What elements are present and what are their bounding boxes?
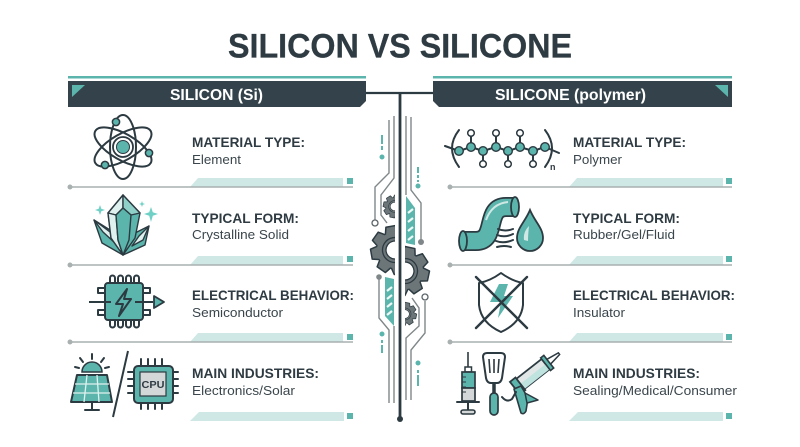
label: silicon typical form: TYPICAL FORM: bbox=[192, 210, 299, 226]
panel header: silicon bbox=[68, 76, 366, 107]
label: silicone typical form: TYPICAL FORM: bbox=[573, 210, 680, 226]
panel header: silicone: SILICONE (polymer) bbox=[495, 87, 646, 104]
label: silicon material type: MATERIAL TYPE: bbox=[192, 134, 305, 150]
panel header: silicone bbox=[433, 76, 732, 107]
label: silicone main industries bbox=[573, 365, 737, 398]
divider row 3 left bbox=[68, 333, 353, 344]
icon: atom bbox=[89, 115, 157, 179]
central circuit spine with gears bbox=[366, 93, 433, 422]
label: silicon electrical behavior: ELECTRICAL BEHAVIOR: bbox=[192, 287, 354, 303]
icon: crystal bbox=[94, 195, 158, 255]
icon: polymer chain bbox=[445, 130, 559, 172]
label: silicone material type bbox=[573, 134, 686, 167]
divider row 2 right bbox=[448, 256, 732, 268]
label: silicon main industries bbox=[192, 365, 319, 398]
icon: shield with crossed bolt bbox=[476, 273, 527, 332]
label: silicone typical form: Rubber/Gel/Fluid bbox=[573, 228, 675, 242]
label: silicone typical form bbox=[573, 210, 680, 242]
icon: chip with bolt bbox=[89, 276, 164, 328]
divider row 1 right bbox=[448, 178, 732, 190]
label: silicone electrical behavior: ELECTRICAL BEHAVIOR: bbox=[573, 287, 735, 303]
title: SILICON VS SILICONE bbox=[228, 28, 572, 66]
label: silicone material type: Polymer bbox=[573, 153, 622, 167]
label: silicone main industries: Sealing/Medical/Consumer bbox=[573, 384, 737, 398]
label: silicon material type bbox=[192, 134, 305, 167]
label: silicon electrical behavior: Semiconductor bbox=[192, 306, 283, 320]
label: silicone electrical behavior bbox=[573, 287, 735, 320]
label: silicon electrical behavior bbox=[192, 287, 354, 320]
icon: silicone tube and drop bbox=[459, 197, 543, 251]
panel header: silicon: SILICON (Si) bbox=[170, 87, 263, 104]
label: silicon typical form: Crystalline Solid bbox=[192, 228, 289, 242]
label: silicon main industries: MAIN INDUSTRIES: bbox=[192, 365, 319, 381]
label: silicone main industries: MAIN INDUSTRIES: bbox=[573, 365, 700, 381]
icon: polymer chain: n bbox=[550, 162, 556, 172]
accent bar row 4 left bbox=[190, 412, 353, 421]
label: silicone material type: MATERIAL TYPE: bbox=[573, 134, 686, 150]
icon: solar panel and cpu bbox=[71, 351, 178, 417]
divider row 3 right bbox=[448, 333, 732, 344]
divider row 2 left bbox=[68, 256, 353, 268]
icon: solar panel and cpu: CPU bbox=[142, 379, 164, 391]
label: silicone electrical behavior: Insulator bbox=[573, 306, 625, 320]
label: silicon main industries: Electronics/Solar bbox=[192, 384, 295, 398]
divider row 1 left bbox=[68, 178, 353, 190]
accent bar row 4 right bbox=[569, 412, 732, 421]
label: silicon typical form bbox=[192, 210, 299, 242]
label: silicon material type: Element bbox=[192, 153, 242, 167]
icon: syringe, spatula, caulk gun bbox=[457, 347, 564, 415]
